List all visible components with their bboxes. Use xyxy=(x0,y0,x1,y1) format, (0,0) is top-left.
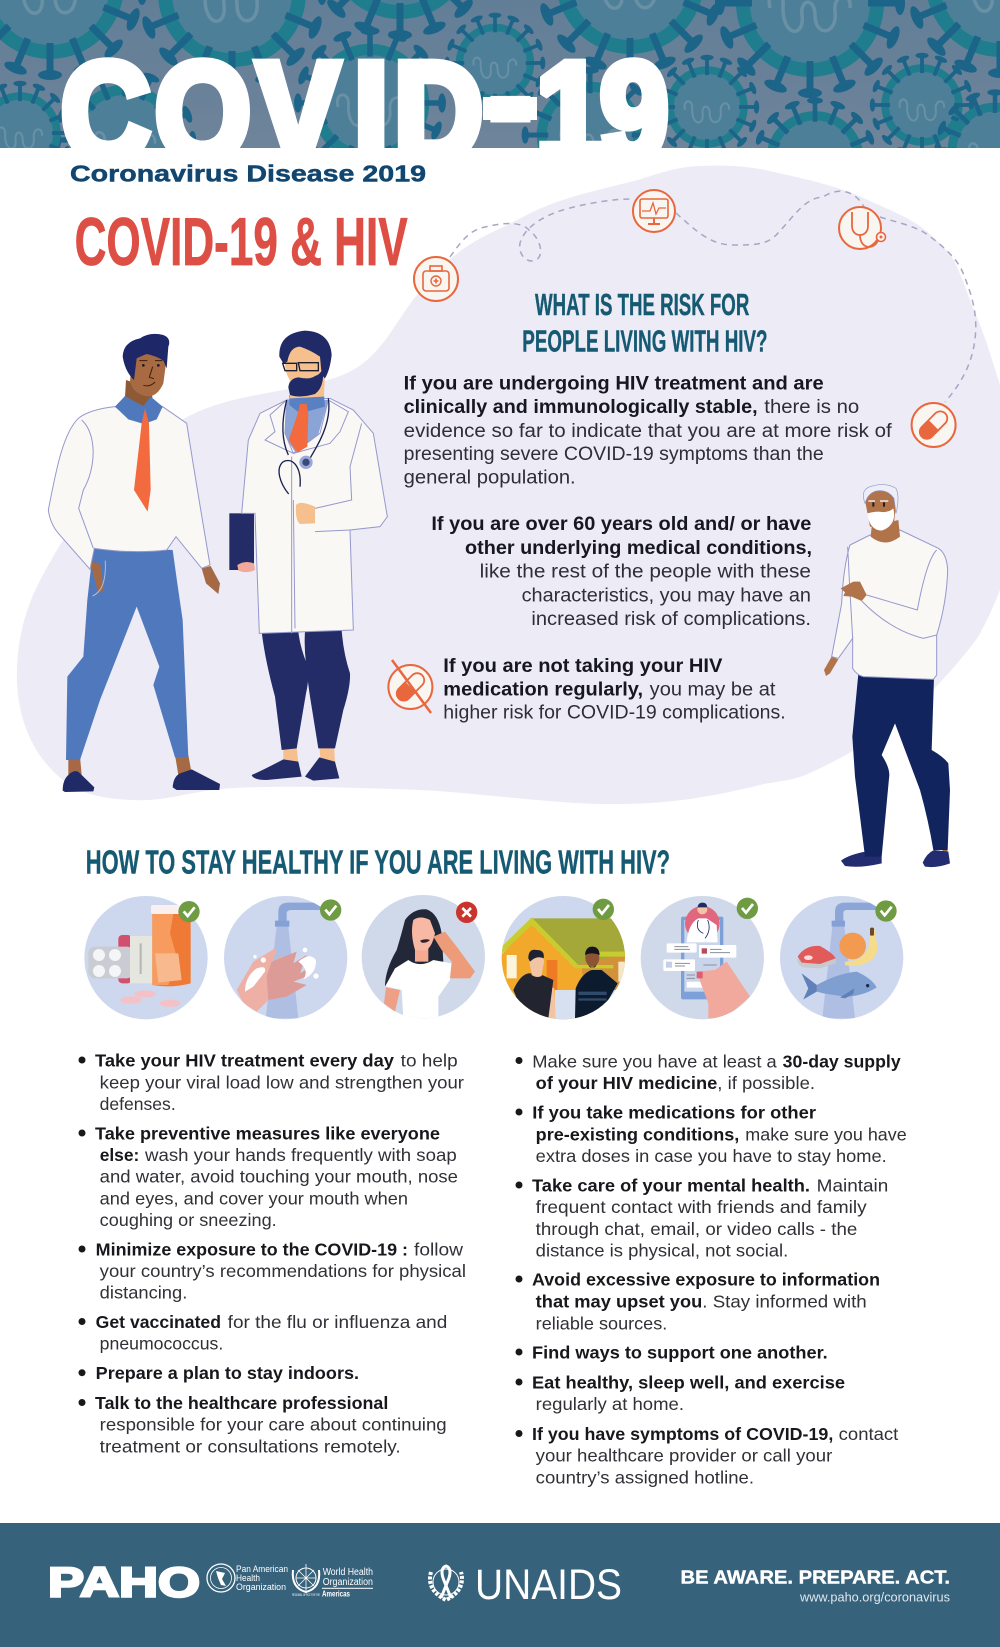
tip: eat healthy xyxy=(516,1372,845,1414)
figure: man with tie xyxy=(48,334,220,792)
text block: over 60: other underlying medical conditions, xyxy=(465,538,812,559)
tip: avoid information: . Stay informed with xyxy=(702,1291,867,1311)
icon: healthy food under tap xyxy=(780,896,903,1019)
text block: stable on treatment: general population. xyxy=(404,468,576,488)
tip: 30-day supply: , if possible. xyxy=(717,1073,815,1093)
icon: medicine bottle and blister xyxy=(84,896,208,1019)
header banner with virus pattern and title xyxy=(0,0,1000,148)
icon: two people in front of house xyxy=(500,896,628,1020)
text block: over 60: characteristics, you may have an xyxy=(522,585,811,606)
text block: stable on treatment: there is no xyxy=(764,397,859,418)
tip: vaccinated: for the flu or influenza and xyxy=(228,1312,447,1332)
icon: no medication xyxy=(388,660,432,713)
main title xyxy=(62,57,668,148)
tip: vaccinated xyxy=(78,1312,447,1354)
tip: symptoms: contact xyxy=(839,1424,898,1444)
tip: minimize exposure: distancing. xyxy=(100,1283,187,1303)
tip: preventive measures: wash your hands frequently with soap xyxy=(144,1145,457,1165)
icon: heart monitor xyxy=(633,190,675,232)
emblem: UNAIDS ribbon xyxy=(430,1566,462,1600)
dashed route line connecting icons xyxy=(450,191,976,402)
lavender background blob xyxy=(17,166,1000,804)
WHO name: Americas xyxy=(322,1588,350,1598)
tip: symptoms: country’s assigned hotline. xyxy=(536,1467,754,1487)
heading: COVID-19 & HIV: COVID-19 & HIV xyxy=(75,204,408,280)
tip: mental health: Maintain xyxy=(817,1176,888,1196)
text block: over 60: like the rest of the people with these xyxy=(480,562,811,583)
tip: take treatment: defenses. xyxy=(100,1094,176,1114)
tip: minimize exposure: follow xyxy=(414,1239,463,1259)
heading: how to stay healthy: HOW TO STAY HEALTHY IF YOU ARE LIVING WITH HIV? xyxy=(86,844,670,881)
tip: talk to professional: Talk to the healthcare professional xyxy=(95,1393,388,1413)
tip: other medications: make sure you have xyxy=(745,1124,907,1144)
heading: what is the risk xyxy=(522,288,768,358)
tip: talk to professional: treatment or consultations remotely. xyxy=(100,1436,401,1456)
tip: preventive measures xyxy=(78,1123,458,1230)
website: www.paho.org/coronavirus xyxy=(799,1590,950,1605)
tip: avoid information: reliable sources. xyxy=(536,1313,667,1333)
tip: mental health xyxy=(516,1176,888,1261)
figure: doctor xyxy=(229,331,387,781)
tip: preventive measures: else: xyxy=(100,1145,139,1165)
PAHO name: Health xyxy=(236,1573,260,1584)
tip: mental health: distance is physical, not social. xyxy=(536,1241,788,1261)
emblem: PAHO globe xyxy=(207,1564,235,1592)
tip: mental health: frequent contact with friends and family xyxy=(536,1197,867,1217)
tip: vaccinated: pneumococcus. xyxy=(100,1334,223,1354)
subtitle: Coronavirus Disease 2019 xyxy=(70,161,426,187)
WHO name: REGIONAL OFFICE FOR THE xyxy=(292,1593,320,1597)
tip: avoid information: Avoid excessive exposure to information xyxy=(532,1270,880,1290)
tip: 30-day supply: Make sure you have at least a xyxy=(532,1051,777,1071)
tip: eat healthy: regularly at home. xyxy=(536,1394,684,1414)
tip: 30-day supply xyxy=(516,1051,901,1093)
figure: older man xyxy=(824,485,950,867)
icon: pill capsule xyxy=(912,403,956,447)
tip: preventive measures: coughing or sneezing. xyxy=(100,1210,277,1230)
heading: what is the risk: WHAT IS THE RISK FOR xyxy=(535,288,749,322)
icon: woman touching face xyxy=(362,895,485,1018)
PAHO name: Organization xyxy=(236,1582,286,1593)
icon row: first three circles xyxy=(84,895,485,1019)
tip: preventive measures: Take preventive measures like everyone xyxy=(95,1123,440,1143)
tip: eat healthy: Eat healthy, sleep well, and exercise xyxy=(532,1372,845,1392)
tip: support one another: Find ways to support one another. xyxy=(532,1343,828,1363)
text block: not taking medication: If you are not taking your HIV xyxy=(443,656,723,677)
tip: 30-day supply: of your HIV medicine xyxy=(536,1073,718,1093)
tip: other medications: pre-existing conditions, xyxy=(536,1124,739,1144)
tip: minimize exposure: Minimize exposure to the COVID-19 : xyxy=(96,1239,408,1259)
tip: plan indoors: Prepare a plan to stay indoors. xyxy=(96,1363,359,1383)
icon: doctor on phone xyxy=(641,896,764,1019)
text block: not taking medication xyxy=(443,656,786,724)
text block: stable on treatment xyxy=(404,373,892,488)
tip: talk to professional: responsible for your care about continuing xyxy=(100,1415,447,1435)
icon: stethoscope xyxy=(839,207,886,249)
main title: COVID-19 xyxy=(61,19,669,190)
tip: mental health: Take care of your mental health. xyxy=(532,1176,810,1196)
logo: UNAIDS: UNAIDS xyxy=(475,1561,622,1609)
PAHO name: Pan American xyxy=(236,1564,288,1575)
tip: take treatment xyxy=(78,1051,464,1114)
tip: preventive measures: and eyes, and cover your mouth when xyxy=(100,1188,408,1208)
tip: take treatment: Take your HIV treatment every day xyxy=(95,1051,394,1071)
WHO name xyxy=(292,1567,373,1598)
tip: other medications: extra doses in case you have to stay home. xyxy=(536,1146,887,1166)
tip: take treatment: keep your viral load low and strengthen your xyxy=(100,1072,464,1092)
icon: medical kit xyxy=(414,257,458,301)
text block: stable on treatment: clinically and immunologically stable, xyxy=(404,397,758,418)
WHO name: Organization xyxy=(323,1577,373,1588)
text block: over 60: increased risk of complications. xyxy=(531,609,811,630)
text block: not taking medication: medication regularly, xyxy=(443,680,643,701)
text block: stable on treatment: presenting severe COVID-19 symptoms than the xyxy=(404,444,824,465)
tip: other medications: If you take medications for other xyxy=(532,1102,816,1122)
text block: not taking medication: higher risk for COVID-19 complications. xyxy=(443,702,786,724)
tip: mental health: through chat, email, or video calls - the xyxy=(536,1219,857,1239)
WHO name: World Health xyxy=(323,1567,373,1578)
list: left column tips xyxy=(78,1051,466,1456)
tip: preventive measures: and water, avoid touching your mouth, nose xyxy=(100,1167,458,1187)
PAHO name xyxy=(236,1564,288,1593)
tip: symptoms xyxy=(516,1424,898,1487)
tip: avoid information xyxy=(516,1270,880,1333)
footer band xyxy=(0,1523,1000,1647)
tip: vaccinated: Get vaccinated xyxy=(96,1312,221,1332)
icon: washing hands xyxy=(224,896,347,1019)
text block: stable on treatment: If you are undergoing HIV treatment and are xyxy=(404,373,824,394)
tip: minimize exposure xyxy=(78,1239,466,1303)
tip: talk to professional xyxy=(78,1393,447,1456)
icon row: last three circles xyxy=(500,896,903,1020)
tip: minimize exposure: your country’s recommendations for physical xyxy=(100,1261,466,1281)
text block: stable on treatment: evidence so far to indicate that you are at more risk of xyxy=(404,421,892,442)
heading: what is the risk: PEOPLE LIVING WITH HIV? xyxy=(522,324,768,358)
text block: not taking medication: you may be at xyxy=(650,680,776,701)
slogan: BE AWARE. PREPARE. ACT. xyxy=(680,1566,950,1587)
tip: take treatment: to help xyxy=(401,1051,458,1071)
tip: symptoms: If you have symptoms of COVID-19, xyxy=(532,1424,833,1444)
list: right column tips xyxy=(516,1051,907,1487)
tip: other medications xyxy=(516,1102,907,1166)
tip: 30-day supply: 30-day supply xyxy=(783,1051,901,1071)
text block: over 60 xyxy=(431,514,812,630)
logo: PAHO: PAHO xyxy=(48,1559,200,1606)
tip: symptoms: your healthcare provider or call your xyxy=(536,1446,832,1466)
text block: over 60: If you are over 60 years old and/ or have xyxy=(431,514,811,535)
tip: avoid information: that may upset you xyxy=(536,1291,702,1311)
emblem: WHO xyxy=(293,1564,319,1592)
